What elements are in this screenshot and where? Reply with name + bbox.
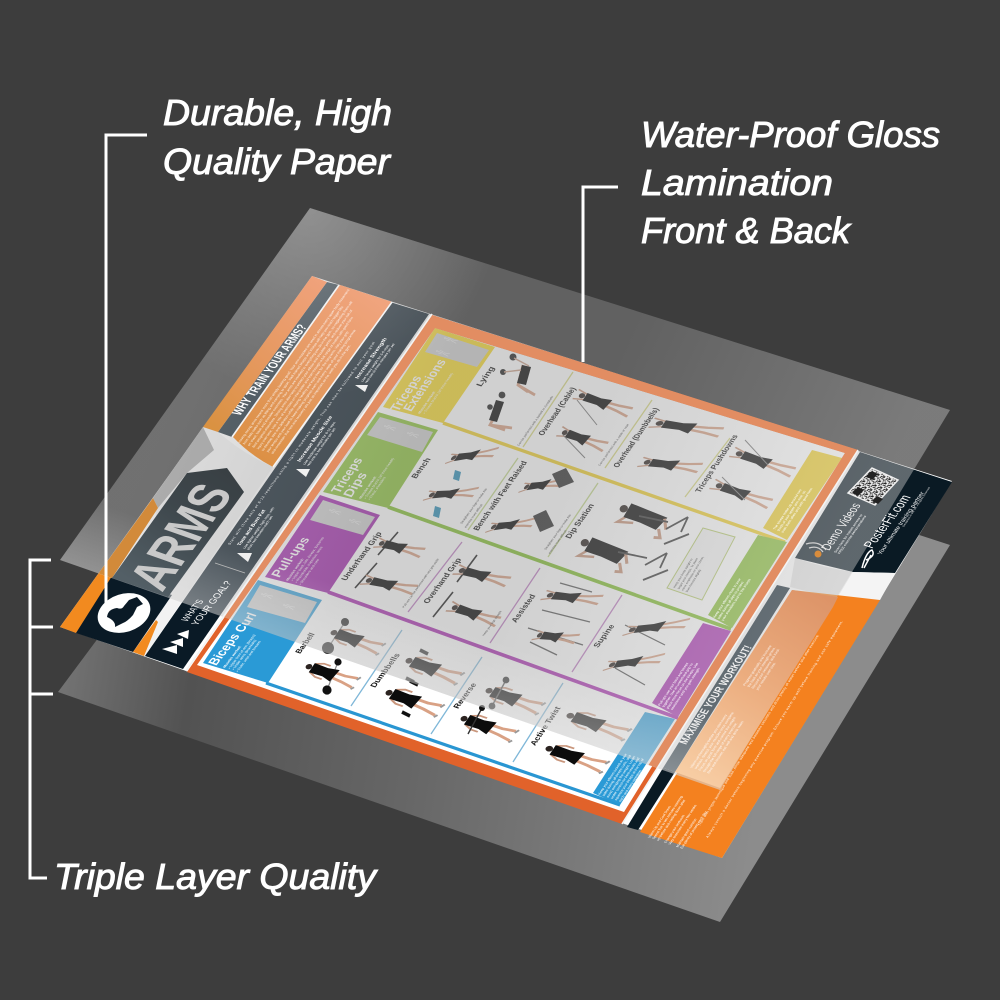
exercise labels: Lying (474, 365, 497, 388)
washed orange strip upper (203, 276, 327, 432)
lower columns: Change your workouts (663, 814, 686, 844)
callout: triple layer bracket: Triple Layer Quality (54, 856, 378, 897)
brand name: PosterFit.com (860, 493, 914, 550)
callout: durable paper: Quality Paper (163, 141, 392, 182)
goal band contents: rest two to three minutes per set (364, 343, 396, 384)
tip box text: more emphasis on your chest, (680, 556, 705, 591)
side note texts: place more focus on the biceps. Use (665, 662, 699, 709)
body map box (367, 417, 433, 452)
side note yellow (763, 450, 842, 540)
exercise labels: Reverse (451, 681, 479, 710)
orange sliver (133, 620, 158, 656)
exercise labels: Overhead (Cable) (536, 386, 578, 437)
goal label (162, 580, 235, 654)
section: triceps dips (323, 412, 787, 629)
side note texts: together. Use an underhand grip to (661, 663, 694, 708)
why bar (218, 282, 339, 437)
side note texts: sides during all biceps curls, and (601, 755, 632, 797)
why text block: and remember that rest and recovery are just as important as the work you do in the gym. (270, 344, 352, 455)
maximise bar (663, 585, 790, 772)
exercise captions: Keep your legs straight (481, 610, 503, 636)
exercise labels: Assisted (509, 593, 538, 624)
active twist figures (541, 708, 632, 774)
footer text: Progress gradually and increase (742, 645, 773, 686)
side note purple (652, 623, 731, 717)
icon: qr code (848, 468, 898, 505)
footer text: the load as your strength grows. (746, 647, 777, 688)
exercise captions: Straighten your legs to make this (543, 513, 572, 550)
side note texts: Keep your elbows tucked at your (597, 752, 629, 795)
assisted (528, 583, 604, 655)
barbell curl figures (302, 618, 386, 695)
callout: gloss lamination (583, 114, 940, 362)
why panel base (233, 285, 392, 467)
why text block: from daily tasks such as lifting and carrying to sport. Well trained biceps and triceps will help you reach bigger lifts (242, 305, 345, 445)
title: biceps curl: • Under arms (brachialis) (231, 639, 257, 670)
side note texts: Keep your elbows close to your (712, 577, 742, 618)
overhead dumbbells (637, 417, 724, 473)
dip station (573, 500, 689, 580)
overhand grip (433, 555, 512, 628)
goal band arrows (237, 385, 368, 562)
goal band contents: Increase Muscle Size (296, 415, 335, 463)
demo text: Scan here for instant access to (833, 514, 864, 553)
title: biceps curl: • Upper front of arm (biceps) (227, 634, 257, 669)
brand wave grey (790, 558, 853, 597)
side note texts: assistance until you gain strength (670, 667, 701, 711)
title: biceps curl: • Outer, wrist and forearm (235, 640, 262, 672)
why text block: Having strong arms means more than simply looking good. Your arm muscles are used in almost every upper body movement (237, 289, 351, 443)
title: biceps curl: Muscles worked: (222, 645, 242, 668)
tip box text: target your triceps. To place (676, 557, 699, 590)
goal band contents: Use moderate weight for 8-12 reps, (302, 421, 337, 465)
title: pull-ups: Pull-ups (268, 535, 313, 579)
legal: Designed in the UK. All rights reserved (901, 486, 931, 527)
exercise labels: Overhand Grip (421, 557, 464, 605)
long lines: Always consult a doctor before beginning any exercise program. Ensure you warm up well before training and use safe equipment. (705, 620, 844, 838)
body map box (310, 500, 375, 535)
header purple (265, 495, 380, 593)
washed columns: Rest and recover, eat well and drink water. (706, 720, 745, 774)
demo videos heading: Demo Videos (818, 501, 864, 552)
side note green (708, 535, 787, 628)
why text block: on chest, back and shoulder exercises. Your arms are involved in everything you do in the gym, so neglecting them will (247, 301, 354, 447)
title: triceps dips: • Chest, shoulders (367, 476, 387, 500)
title: triceps dips: Triceps (328, 456, 366, 495)
header blue (203, 580, 322, 683)
callout: durable paper (106, 92, 392, 604)
icon: demo signal (806, 543, 826, 558)
tip box text: Keep your body upright to (672, 558, 694, 588)
lower columns: up before and cooling down after (656, 798, 687, 841)
side note texts: thirds of your upper arm size, so (776, 490, 807, 532)
poster frame (187, 315, 858, 824)
exercise labels: Dumbbells (368, 652, 402, 689)
exercise captions: Straighten your legs to make this (459, 487, 488, 524)
exercise captions: Can be performed with a cable or rope (597, 423, 630, 466)
logo box (76, 576, 172, 652)
washed columns: Focus on good form and control the weight (698, 717, 737, 771)
goal band contents: Use heavy weight for 3-6 reps, (360, 344, 391, 382)
why text block: injury over time. Use a mix of exercises on this poster and train through a full range of motion with good form (256, 316, 354, 450)
exercise labels: Dip Station (563, 503, 596, 540)
exercise captions: exercise more difficult (547, 530, 568, 554)
washed columns: workout. Stretch your muscles once complete. (693, 711, 735, 770)
supine (603, 618, 690, 685)
poster paper (60, 276, 952, 858)
bottom rule yellow (443, 423, 785, 542)
exercise labels: Underhand Grip (339, 531, 384, 582)
goal band contents: Start with three sets of 8-12 repetitions using a light to moderate weight. This can then be followed to suit your goal (227, 341, 376, 545)
bottom rule purple (328, 592, 678, 718)
icon: posterfit swirl (862, 550, 873, 568)
top sheet backing on dark background (60, 208, 950, 790)
orange strip lower (60, 573, 115, 633)
callout: triple layer bracket (30, 560, 378, 897)
side note texts: each and every repetition (618, 769, 643, 802)
poster base layer (30, 92, 952, 897)
goal band contents: Tone and Burn Fat (236, 509, 268, 547)
exercise figures: triceps extensions (487, 354, 796, 509)
side note blue (593, 712, 675, 805)
callout: gloss lamination: Water-Proof Gloss (641, 114, 940, 155)
title: pull-ups: • Rhomboids, trapezius, teres (294, 546, 324, 583)
header green (323, 412, 438, 508)
title: triceps dips (328, 456, 395, 500)
section: biceps curl (203, 580, 675, 805)
title: biceps curl: Biceps Curl (205, 611, 260, 667)
title: pull-ups: • Upper back, lats, biceps, forearms (290, 536, 325, 581)
title: triceps extensions: • Triceps brachii (all three heads) (422, 373, 454, 414)
footer orange (640, 590, 880, 858)
washed columns: through the full range of every exercise. (702, 722, 738, 773)
lower columns: Warm Up and Cool Down (647, 805, 672, 838)
goal band contents: short rest between each set (246, 515, 274, 551)
arms title: ARMS (117, 477, 245, 597)
body map box (247, 585, 317, 623)
arms arrow washed (112, 468, 244, 597)
side note texts: squeeze your biceps at the top of (614, 758, 645, 801)
title: pull-ups: • Shoulders and core (298, 558, 320, 585)
exercise labels: Overhead (Dumbbells) (611, 406, 661, 469)
bottom laminate sheet (58, 340, 950, 922)
title: pull-ups (268, 535, 325, 585)
frame washed (224, 315, 858, 768)
darker wave (153, 427, 214, 508)
goal label: YOUR GOAL? (189, 580, 235, 627)
brand wave light (838, 572, 895, 600)
goal band (145, 302, 429, 669)
title: pull-ups: Muscles worked: (285, 558, 305, 581)
exercise figures: pull-ups (355, 532, 690, 685)
bench dips (423, 447, 499, 518)
washed orange strip lower (98, 498, 158, 578)
exercise labels: Triceps Pushdowns (693, 433, 740, 494)
footer text (647, 620, 844, 849)
header yellow (383, 328, 495, 423)
why text block: limit progress elsewhere. Strong arms also help to protect your elbow and shoulder joints, and reduce your risk of (251, 309, 354, 448)
callout: gloss lamination: Lamination (641, 162, 833, 203)
side note texts: your shoulders and hit the triceps (720, 578, 752, 621)
tagline: Your ultimate training partner (877, 491, 926, 556)
overhead cable (556, 389, 633, 458)
section: pull-ups (265, 495, 731, 718)
side note texts (597, 485, 814, 802)
why text block: to develop size and definition while staying healthy and injury free for the long term. Vary your grip (261, 331, 350, 451)
side note texts: The triceps make up around two (772, 489, 803, 530)
underhand grip (355, 532, 426, 595)
dividers (408, 542, 622, 672)
triple arrows (162, 630, 189, 654)
exercise figures: biceps curl (302, 618, 632, 774)
heading: why train your arms: WHY TRAIN YOUR ARMS? (229, 322, 310, 417)
exercise captions: Pull-ups can be performed with any grip width (401, 558, 440, 608)
why text block: your tempo and your load to keep making progress each and every week of your training programme (265, 329, 357, 453)
demo text: FREE exercise demonstrations (837, 515, 868, 555)
dumbbell curl figures (381, 650, 465, 718)
lower columns: Eat plenty of protein each day (679, 811, 708, 849)
callout: durable paper: Durable, High (163, 92, 392, 133)
brand block (806, 468, 931, 568)
exercise captions: Can be performed with a barbell or dumbbells (516, 395, 555, 446)
bench with feet raised (485, 468, 574, 533)
icon: flexed arm logo (92, 587, 156, 639)
title: triceps dips: • Triceps brachii (all three heads) (363, 458, 395, 499)
top laminate sheet overlay (60, 208, 950, 790)
lower columns: Vary exercises every few weeks (668, 804, 698, 845)
tip box text: lean forward slightly (685, 568, 702, 593)
footer text: Train with proper technique and load. Allow adequate rest between sessions and drink plenty of water before and after exercise. (697, 634, 820, 826)
footer text: Record your sessions and track (751, 648, 781, 689)
exercise figures: triceps dips (423, 447, 689, 580)
body map box (425, 333, 489, 367)
dividers (468, 458, 598, 557)
title: triceps dips: Muscles worked: (358, 476, 378, 499)
why panel washed (233, 285, 392, 467)
right brand block (795, 452, 952, 573)
footer orange washed (675, 590, 838, 788)
exercise labels: Barbell (293, 632, 317, 655)
exercise labels: Bench (409, 457, 433, 480)
side note texts: under control for best results and (610, 757, 641, 800)
exercise captions: exercise more difficult (463, 504, 484, 528)
washed columns: Warm up thoroughly before you start every (689, 714, 728, 768)
title: triceps extensions: Triceps (387, 374, 425, 413)
dividers (351, 630, 563, 762)
section headers text (205, 357, 454, 672)
callout: gloss lamination: Front & Back (641, 210, 852, 251)
goal band contents: Use lighter weight, high reps, with (242, 507, 275, 549)
side note texts: sides during all dips to protect (716, 581, 745, 620)
title: triceps extensions: Muscles worked: (417, 391, 437, 414)
exercise labels: Active Twist (528, 705, 563, 747)
bottom rule blue (266, 683, 620, 805)
poster separators (186, 285, 858, 824)
exercise labels: Bench with Feet Raised (471, 460, 529, 532)
section: triceps extensions (383, 328, 842, 542)
title: triceps extensions: Extensions (400, 357, 449, 413)
exercise captions (401, 395, 630, 636)
lower columns: Spend five to ten minutes warming (651, 795, 684, 840)
exercise labels: Supine (591, 623, 617, 649)
tip box (667, 528, 735, 600)
footer text: your results over time. (755, 662, 777, 691)
body map figures (260, 336, 458, 610)
dividers (523, 372, 730, 497)
footer navy (627, 768, 675, 830)
heading: maximise your workout: MAXIMISE YOUR WORKOUT! (677, 644, 755, 746)
title: triceps dips: Dips (340, 470, 370, 499)
goal label: WHAT'S (179, 598, 207, 623)
grey wave (133, 427, 273, 656)
goal band contents: rest one to two minutes per set (306, 428, 337, 467)
lying extension (487, 354, 535, 430)
exercise labels (293, 365, 740, 747)
bottom rule green (388, 507, 731, 629)
lower columns: Maintain good nutrition (675, 818, 698, 848)
side note texts: Pull-ups use your back and biceps (657, 662, 690, 706)
pushdowns (709, 440, 796, 509)
side note texts: train them often and with good form (780, 487, 814, 533)
reverse curl figures (456, 677, 546, 743)
goal band contents: Increase Strength (354, 337, 389, 380)
side note texts: avoid swinging the weight. Lower (605, 755, 637, 798)
